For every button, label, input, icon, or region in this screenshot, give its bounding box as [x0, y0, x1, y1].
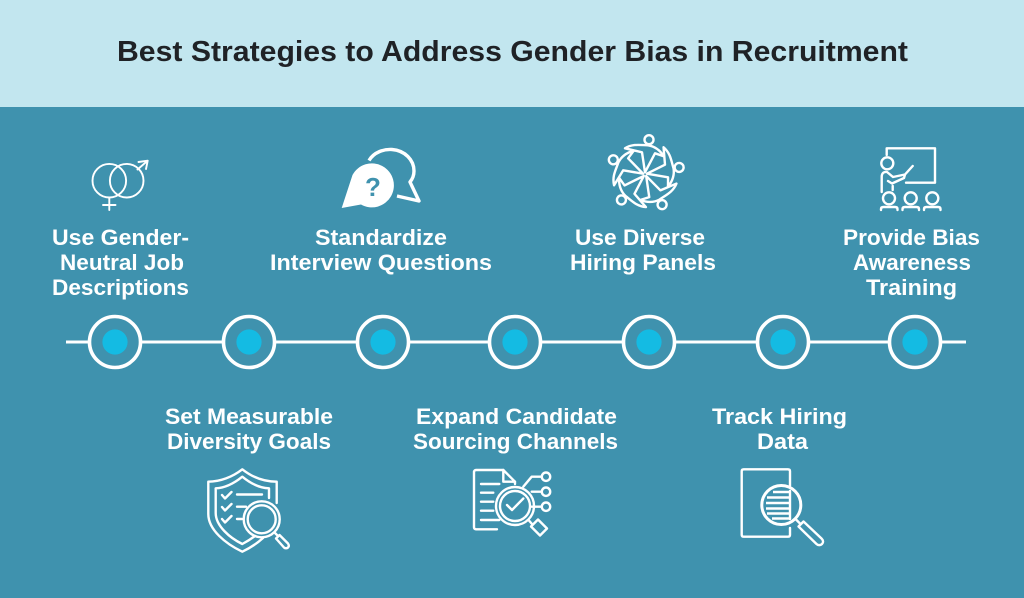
- label: gender-neutral job descriptions: [52, 225, 189, 300]
- icon: shield with checklist and magnifier: [208, 469, 289, 552]
- icon: trainer at board with audience: [881, 148, 940, 210]
- label: provide bias awareness training: Awareness: [853, 250, 971, 275]
- label: track hiring data: [712, 404, 847, 454]
- icon: diverse panel circle: [602, 135, 688, 218]
- icon: document with magnifier and nodes: [474, 470, 550, 536]
- title: Best Strategies to Address Gender Bias in Recruitment: [117, 36, 908, 68]
- label: provide bias awareness training: Provide Bias: [843, 225, 980, 250]
- label: track hiring data: Track Hiring: [712, 404, 847, 429]
- label: expand candidate sourcing channels: Sourcing Channels: [413, 429, 618, 454]
- timeline: [66, 316, 966, 368]
- timeline node 4: [490, 316, 540, 368]
- timeline node 3: [358, 316, 408, 368]
- label: expand candidate sourcing channels: [413, 404, 618, 454]
- label: provide bias awareness training: [843, 225, 980, 300]
- icon: question speech bubbles: [342, 149, 419, 208]
- icon: gender symbols: [92, 161, 148, 210]
- label: use diverse hiring panels: Use Diverse: [575, 225, 705, 250]
- label: standardize interview questions: Interview Questions: [270, 250, 492, 275]
- timeline node 1: [90, 316, 140, 368]
- label: set measurable diversity goals: Set Measurable: [165, 404, 333, 429]
- label: set measurable diversity goals: [165, 404, 333, 454]
- timeline node 6: [758, 316, 808, 368]
- label: provide bias awareness training: Training: [866, 275, 957, 300]
- label: use diverse hiring panels: [570, 225, 716, 275]
- label: use diverse hiring panels: Hiring Panels: [570, 250, 716, 275]
- label: set measurable diversity goals: Diversity Goals: [167, 429, 331, 454]
- label: standardize interview questions: Standardize: [315, 225, 447, 250]
- timeline node 7: [890, 316, 940, 368]
- timeline node 5: [624, 316, 674, 368]
- title banner: [0, 0, 1024, 107]
- label: expand candidate sourcing channels: Expand Candidate: [416, 404, 617, 429]
- label: standardize interview questions: [270, 225, 492, 275]
- label: gender-neutral job descriptions: Descriptions: [52, 275, 189, 300]
- label: gender-neutral job descriptions: Neutral Job: [60, 250, 184, 275]
- label: gender-neutral job descriptions: Use Gender-: [52, 225, 189, 250]
- icon: question speech bubbles: ?: [365, 172, 381, 202]
- timeline node 2: [224, 316, 274, 368]
- label: track hiring data: Data: [757, 429, 809, 454]
- icon: report with magnifier: [742, 469, 823, 545]
